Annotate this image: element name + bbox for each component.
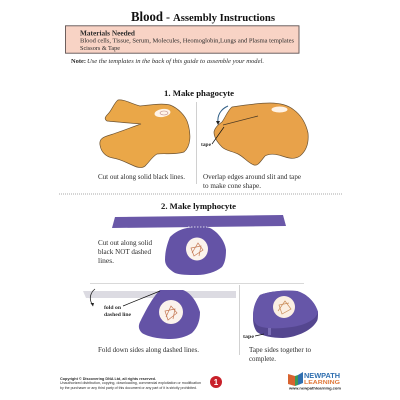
image: folded strip (83, 291, 236, 298)
caption: cut out not dashed: black NOT dashed (98, 248, 152, 256)
note: Note: (71, 59, 86, 65)
label: tape pointer on disc (243, 334, 264, 340)
copyright text: Unauthorized distribution, copying, downloading, commercial exploitation or modification (60, 381, 201, 385)
arrow: fold direction (90, 289, 95, 306)
title (131, 10, 276, 25)
panel: materials needed: Materials Needed (80, 30, 135, 38)
image: flat phagocyte template (100, 100, 190, 168)
copyright text (60, 377, 201, 390)
panel: materials needed: Blood cells, Tissue, Serum, Molecules, Heomoglobin,Lungs and Plasma templates (80, 38, 295, 44)
divider between lymphocyte steps (238, 285, 241, 355)
logo: NewPath Learning: www.newpathlearning.com (288, 386, 342, 390)
divider above fold step (90, 282, 304, 285)
copyright text: Copyright © Discovering DNA Ltd, all rights reserved. (60, 377, 156, 381)
logo: NewPath Learning (288, 372, 342, 390)
label: tape with pointer (201, 127, 224, 148)
caption: overlap edges: Overlap edges around slit and tape (203, 173, 301, 181)
heading: make phagocyte: 1. Make phagocyte (164, 88, 234, 98)
caption: overlap edges (203, 173, 301, 190)
heading: make lymphocyte: 2. Make lymphocyte (161, 201, 236, 211)
arrow: overlap direction (216, 106, 228, 125)
image: lymphocyte template with strip (112, 215, 286, 275)
label: fold on dashed line with pointer: dashed line (104, 312, 132, 318)
caption: cut out not dashed: Cut out along solid (98, 239, 152, 247)
caption: cut out solid lines: Cut out along solid black lines. (98, 173, 185, 181)
logo: NewPath Learning: NEWPATH (304, 373, 340, 380)
dotted section divider (59, 193, 343, 195)
caption: tape sides together: complete. (249, 355, 276, 363)
caption: fold down sides: Fold down sides along dashed lines. (98, 346, 199, 354)
label: fold on dashed line with pointer: fold on (104, 305, 121, 311)
title: Assembly Instructions (173, 12, 276, 24)
label: tape pointer on disc: tape (243, 334, 255, 340)
image: lymphocyte disc folded (139, 290, 200, 339)
panel: materials needed (66, 26, 299, 53)
image: completed lymphocyte (253, 291, 318, 338)
image: taped phagocyte cone (214, 103, 308, 165)
divider between phagocyte steps (195, 102, 198, 184)
page number badge: 1 (214, 378, 219, 387)
copyright text: by the purchaser or any third party of this document or any part of it is strictly prohibited. (60, 386, 197, 390)
caption: cut out not dashed (98, 239, 152, 265)
panel: materials needed: Scissors & Tape (80, 46, 120, 52)
label: tape with pointer: tape (201, 142, 212, 148)
note: Use the templates in the back of this guide to assemble your model. (87, 58, 264, 65)
page number badge (210, 376, 222, 388)
logo: NewPath Learning: LEARNING (304, 380, 340, 386)
caption: tape sides together: Tape sides together to (249, 346, 311, 354)
caption: cut out not dashed: lines. (98, 257, 114, 265)
caption: overlap edges: to make cone shape. (203, 182, 261, 190)
label: fold on dashed line with pointer (104, 291, 160, 318)
caption: tape sides together (249, 346, 311, 363)
title: - (166, 10, 170, 24)
title: Blood (131, 10, 163, 25)
